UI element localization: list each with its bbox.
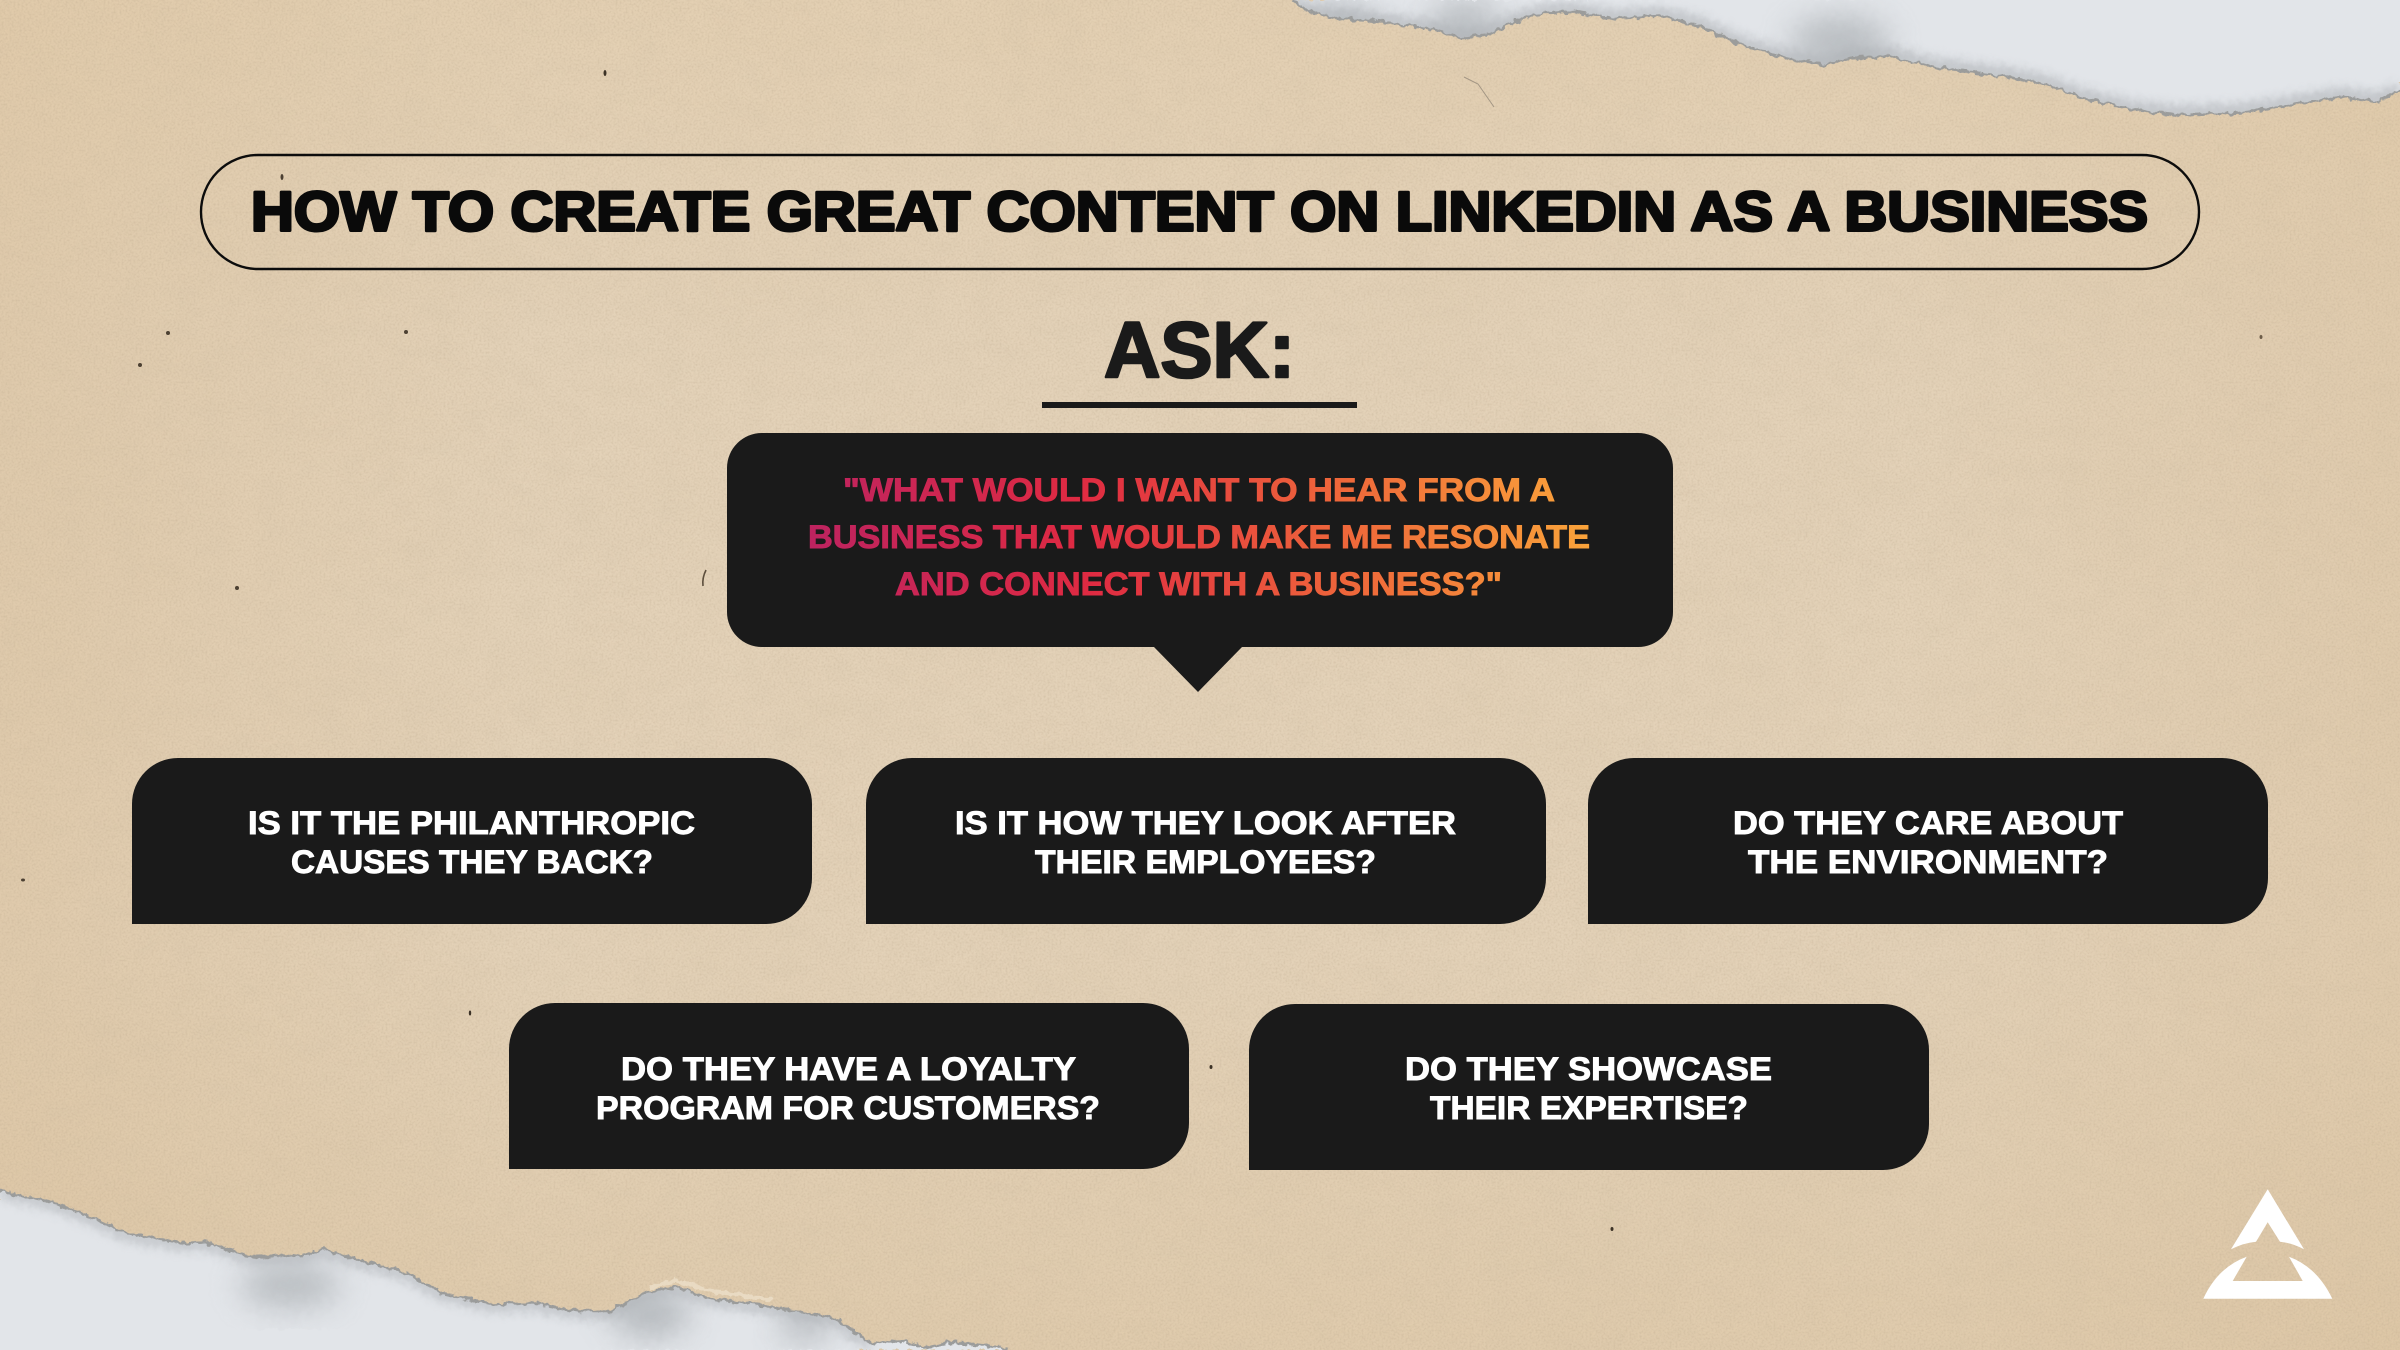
card: environment: THE ENVIRONMENT?	[1748, 844, 2108, 880]
torn paper corner: top right	[1292, 0, 2400, 115]
card: employees: IS IT HOW THEY LOOK AFTER	[955, 805, 1456, 841]
title text: HOW TO CREATE GREAT CONTENT ON LINKEDIN AS A BUSINESS	[251, 180, 2148, 242]
torn paper corner: bottom left	[0, 1191, 1007, 1350]
speech bubble: key question	[727, 433, 1673, 692]
card: expertise: THEIR EXPERTISE?	[1430, 1090, 1748, 1126]
quote text: AND CONNECT WITH A BUSINESS?"	[895, 566, 1502, 602]
heading: ASK	[1042, 305, 1357, 408]
card: environment: DO THEY CARE ABOUT	[1733, 805, 2123, 841]
card: loyalty program: PROGRAM FOR CUSTOMERS?	[596, 1090, 1100, 1126]
heading: ASK: ASK:	[1104, 305, 1295, 394]
card: philanthropic causes	[132, 758, 812, 924]
card: employees	[866, 758, 1546, 924]
card: philanthropic causes: CAUSES THEY BACK?	[291, 844, 653, 880]
card: loyalty program: DO THEY HAVE A LOYALTY	[621, 1051, 1076, 1087]
card: expertise: DO THEY SHOWCASE	[1405, 1051, 1772, 1087]
card: employees: THEIR EMPLOYEES?	[1035, 844, 1376, 880]
card: loyalty program	[509, 1003, 1189, 1169]
card: philanthropic causes: IS IT THE PHILANTHROPIC	[248, 805, 695, 841]
quote text: BUSINESS THAT WOULD MAKE ME RESONATE	[808, 519, 1590, 555]
card: environment	[1588, 758, 2268, 924]
quote text: "WHAT WOULD I WANT TO HEAR FROM A	[843, 472, 1555, 508]
quote text	[808, 472, 1590, 602]
card: expertise	[1249, 1004, 1929, 1170]
title pill outline	[201, 155, 2199, 269]
icon: triangle logo	[2203, 1189, 2332, 1299]
title	[201, 155, 2199, 269]
